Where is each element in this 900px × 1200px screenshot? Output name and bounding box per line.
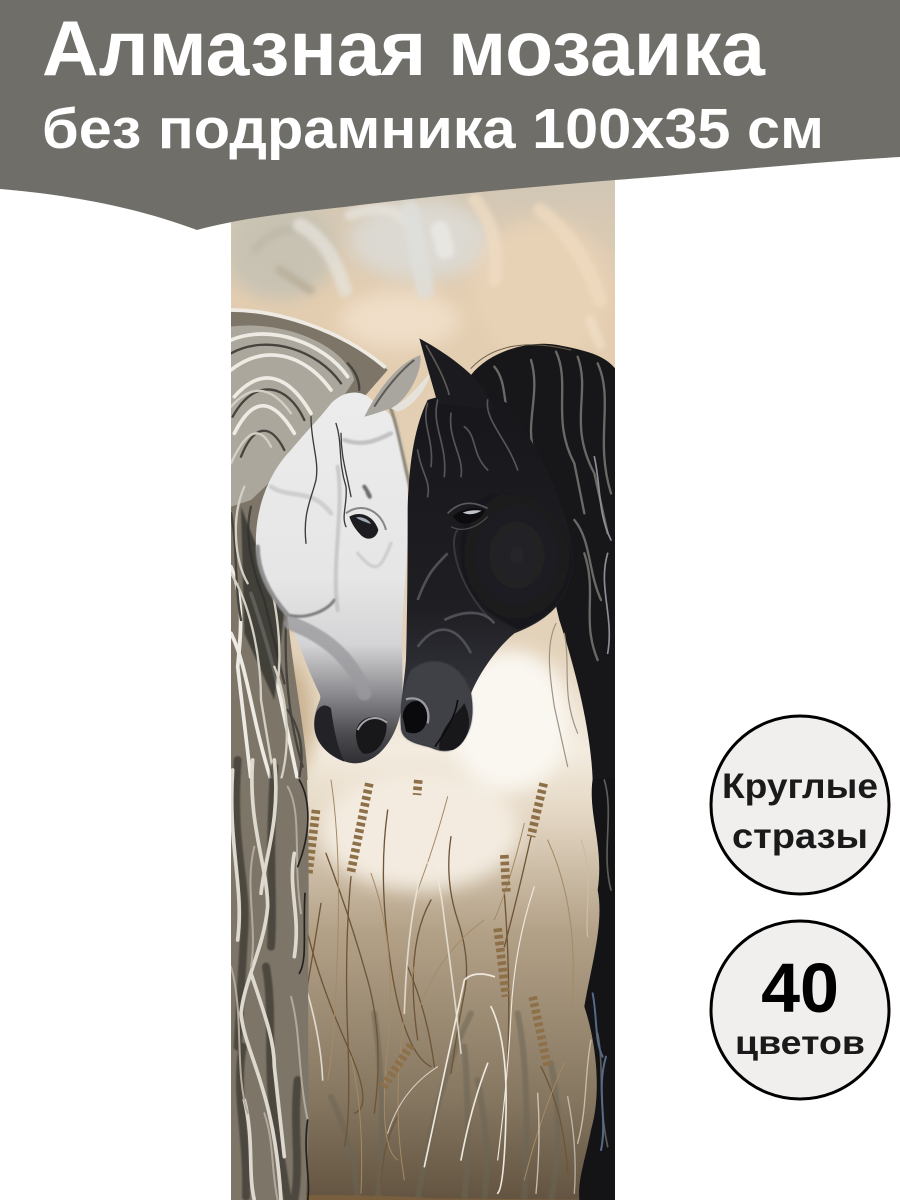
pale blades xyxy=(308,863,575,1193)
black horse muzzle xyxy=(401,553,494,751)
badge: 40 colours: цветов xyxy=(735,1024,865,1061)
title: без подрамника 100х35 см xyxy=(42,97,824,161)
title: Алмазная мозаика xyxy=(42,4,766,92)
brown blades xyxy=(303,810,568,1193)
black horse nostril xyxy=(403,701,428,733)
white horse nostril xyxy=(356,717,387,754)
grey mane of white horse xyxy=(231,308,388,1200)
face shading xyxy=(258,400,414,693)
badge: 40 colours: 40 xyxy=(761,949,839,1027)
white horse muzzle xyxy=(314,705,387,762)
upper mane xyxy=(231,308,388,780)
wheat ears xyxy=(308,780,548,1088)
lower grass and wheat xyxy=(306,780,580,1200)
badge: round rhinestones xyxy=(711,716,889,894)
badge: round rhinestones: Круглые xyxy=(722,767,878,806)
black horse cheek xyxy=(488,546,552,630)
white horse forelock xyxy=(305,417,351,543)
painting: two horses xyxy=(225,170,615,1200)
badge: round rhinestones: стразы xyxy=(732,817,868,856)
lower mane xyxy=(231,760,309,1200)
title xyxy=(42,4,824,161)
ground xyxy=(306,1195,580,1200)
black mane of black horse xyxy=(471,344,615,1200)
broad grey blades xyxy=(331,1013,558,1200)
badge: 40 colours xyxy=(711,921,889,1099)
upper black mane xyxy=(471,344,615,780)
header banner xyxy=(0,0,900,230)
white horse ear xyxy=(364,355,421,417)
white horse head xyxy=(256,355,431,763)
black horse forelock xyxy=(418,400,518,497)
painting background xyxy=(225,170,615,1200)
black horse ear xyxy=(419,338,487,398)
black horse head xyxy=(401,338,574,751)
black horse eye xyxy=(448,503,488,529)
white horse eye xyxy=(346,508,386,539)
lower black mane xyxy=(578,779,615,1200)
